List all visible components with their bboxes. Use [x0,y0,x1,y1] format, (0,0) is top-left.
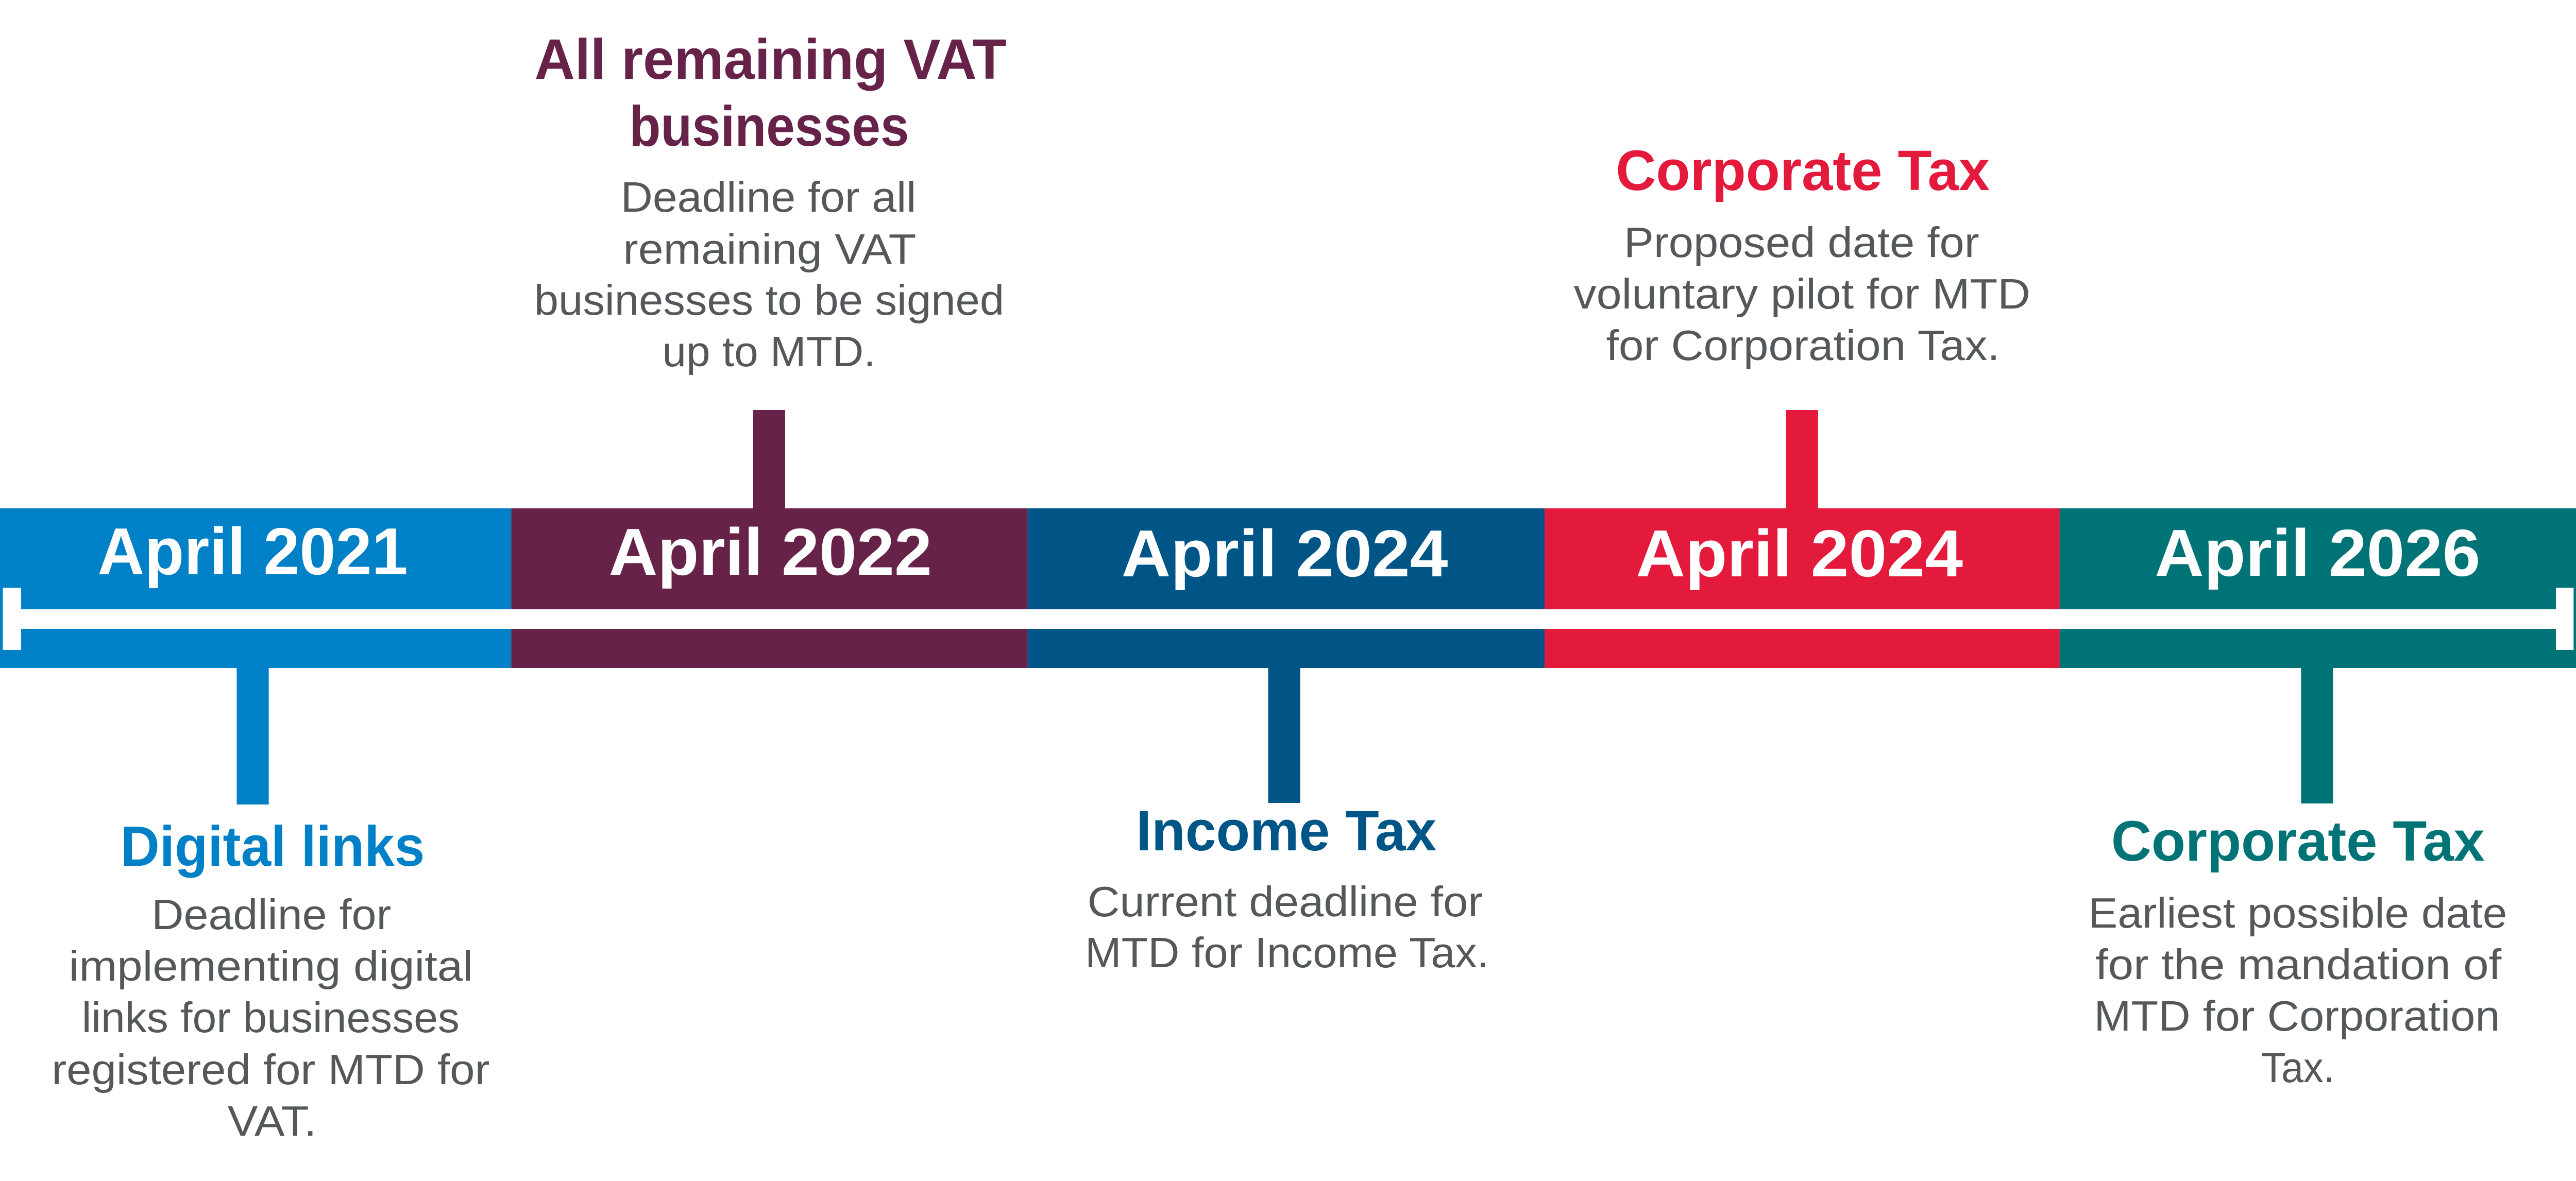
text block: mandation description: Tax. [2261,1043,2334,1091]
band segment: April 2022 [511,508,1028,668]
text block: remaining VAT description: businesses to be signed [534,276,1004,324]
text block: digital links description: registered for MTD for [52,1046,489,1093]
band segment: April 2021 [0,508,511,668]
text block: voluntary pilot description [1574,218,2030,369]
text block: voluntary pilot description: Proposed date for [1624,218,1979,266]
date label: April 2022: April 2022 [609,515,932,589]
text block: mandation description: for the mandation of [2095,940,2502,988]
text block: income tax description [1085,878,1489,977]
panel: April 2024 corporate tax pilot [1545,140,2060,668]
heading: All remaining VAT businesses: businesses [629,95,909,158]
panel: April 2021 digital links [0,508,511,1145]
panel: April 2026 corporate tax mandation [2060,508,2576,1091]
text block: remaining VAT description [534,173,1004,375]
connector stem: April 2024 income tax [1268,668,1300,803]
text block: income tax description: Current deadline for [1088,878,1483,926]
date label: April 2026: April 2026 [2155,516,2480,590]
text block: income tax description: MTD for Income Tax. [1085,929,1489,977]
heading: Corporate Tax: Corporate Tax [1616,140,1990,202]
band segment: April 2024 corporate tax [1545,508,2060,668]
text block: voluntary pilot description: for Corporation Tax. [1606,321,2000,369]
panel: April 2024 income tax [1028,508,1545,977]
text block: remaining VAT description: Deadline for all [621,173,916,221]
text block: digital links description: Deadline for [151,891,391,938]
text block: mandation description [2088,889,2507,1091]
heading: All remaining VAT businesses [535,28,1007,158]
text block: digital links description: links for businesses [82,994,460,1041]
band segment: April 2026 [2060,508,2576,668]
connector stem: April 2021 [236,668,269,805]
connector stem: April 2022 [753,410,785,508]
text block: remaining VAT description: remaining VAT [623,225,916,273]
text block: digital links description: implementing digital [69,942,473,990]
connector stem: April 2026 [2301,668,2333,803]
heading: Digital links: Digital links [121,815,425,878]
text block: mandation description: Earliest possible date [2088,889,2507,937]
text block: remaining VAT description: up to MTD. [663,328,875,375]
text block: digital links description: VAT. [228,1097,316,1145]
heading: Income Tax: Income Tax [1136,800,1436,863]
text block: digital links description [52,891,489,1145]
text block: voluntary pilot description: voluntary pilot for MTD [1574,270,2030,318]
band segment: April 2024 income tax [1028,508,1545,668]
connector stem: April 2024 corporate tax [1786,410,1818,508]
date label: April 2021: April 2021 [97,515,408,589]
panel: April 2022 all remaining VAT businesses [511,28,1028,668]
heading: All remaining VAT businesses: All remaining VAT [535,28,1007,91]
date label: April 2024: April 2024 [1636,517,1963,591]
text block: mandation description: MTD for Corporation [2094,992,2500,1040]
timeline axis line with end caps [3,588,2573,650]
heading: Corporate Tax: Corporate Tax [2111,810,2485,873]
date label: April 2024: April 2024 [1122,517,1448,591]
